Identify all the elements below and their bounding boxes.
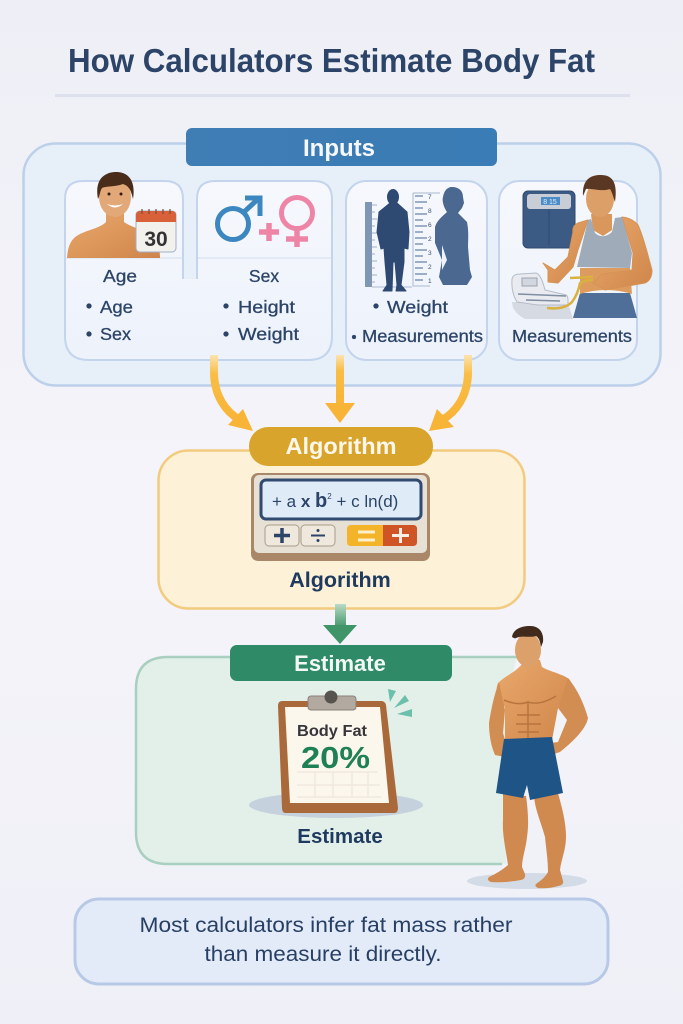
panel: algorithm <box>158 427 524 608</box>
icon: body silhouettes with rulers: 7 <box>428 194 432 201</box>
card text: age: Age <box>100 297 133 317</box>
card text: age <box>86 266 137 344</box>
legs <box>488 793 528 882</box>
card text: sex <box>224 266 299 344</box>
title: How Calculators Estimate Body Fat <box>68 42 595 79</box>
panel: estimate <box>136 645 517 864</box>
icon: calculator: + c ln(d) <box>332 492 398 511</box>
icon: sex symbols <box>218 198 312 247</box>
icon: man with calendar <box>67 172 176 258</box>
arrow: right input to algorithm <box>429 355 468 431</box>
text: body fat value <box>297 723 370 775</box>
arrow: algorithm to estimate <box>323 604 357 644</box>
icon: calculator: 2 <box>327 492 332 501</box>
icon: bathroom scale: 8 15 <box>543 199 557 206</box>
card: age and sex <box>65 172 332 360</box>
card text: weight, measurements <box>352 297 483 346</box>
icon: standing muscular man <box>467 626 588 889</box>
card text: sex: Sex <box>249 266 279 286</box>
icon: bathroom scale <box>523 191 575 248</box>
card text: sex: Height <box>238 297 295 317</box>
icon: clipboard result <box>249 689 423 818</box>
text: body fat value: 20% <box>301 740 370 775</box>
card text: weight, measurements: Measurements <box>362 326 483 346</box>
icon: body silhouettes with rulers: 6 <box>428 222 432 229</box>
torso <box>497 660 571 742</box>
icon: sparks <box>388 689 412 717</box>
card text: age: Age <box>103 266 137 286</box>
icon: calculator: + a x b <box>272 490 327 512</box>
arrow: center input to algorithm <box>325 355 355 423</box>
card: measurements <box>499 175 652 360</box>
icon: body silhouettes with rulers <box>365 187 472 291</box>
heading: inputs: Inputs <box>303 135 375 162</box>
arrow: left input to algorithm <box>214 355 253 431</box>
panel: inputs <box>24 144 660 386</box>
shorts <box>496 737 563 800</box>
card text: weight, measurements: Weight <box>387 297 448 317</box>
icon: body silhouettes with rulers: 3 <box>428 250 432 257</box>
heading: estimate: Estimate <box>294 651 386 676</box>
callout: Most calculators infer fat mass rather <box>140 914 512 937</box>
icon: calendar: 30 <box>144 228 168 251</box>
callout <box>75 899 608 984</box>
callout: than measure it directly. <box>204 943 442 966</box>
card text: sex: Weight <box>238 324 299 344</box>
icon: body composition device <box>512 273 573 319</box>
icon: body silhouettes with rulers: 2 <box>428 264 432 271</box>
icon: calculator <box>251 473 430 561</box>
card: weight and measurements <box>346 181 487 360</box>
arms <box>489 682 507 757</box>
heading: inputs <box>186 128 497 166</box>
heading: estimate <box>230 645 452 681</box>
icon: body silhouettes with rulers: 1 <box>428 278 432 285</box>
icon: body silhouettes with rulers: 8 <box>428 208 432 215</box>
card text: measurements: Measurements <box>512 326 632 346</box>
label: estimate: Estimate <box>297 825 383 848</box>
head <box>515 633 541 667</box>
icon: man measuring waist <box>543 175 652 318</box>
heading: algorithm <box>249 427 433 466</box>
icon: body silhouettes with rulers: 2 <box>428 236 432 243</box>
heading: algorithm: Algorithm <box>286 433 396 459</box>
card text: age: Sex <box>100 324 131 344</box>
text: body fat value: Body Fat <box>297 723 367 740</box>
label: algorithm: Algorithm <box>289 568 391 592</box>
